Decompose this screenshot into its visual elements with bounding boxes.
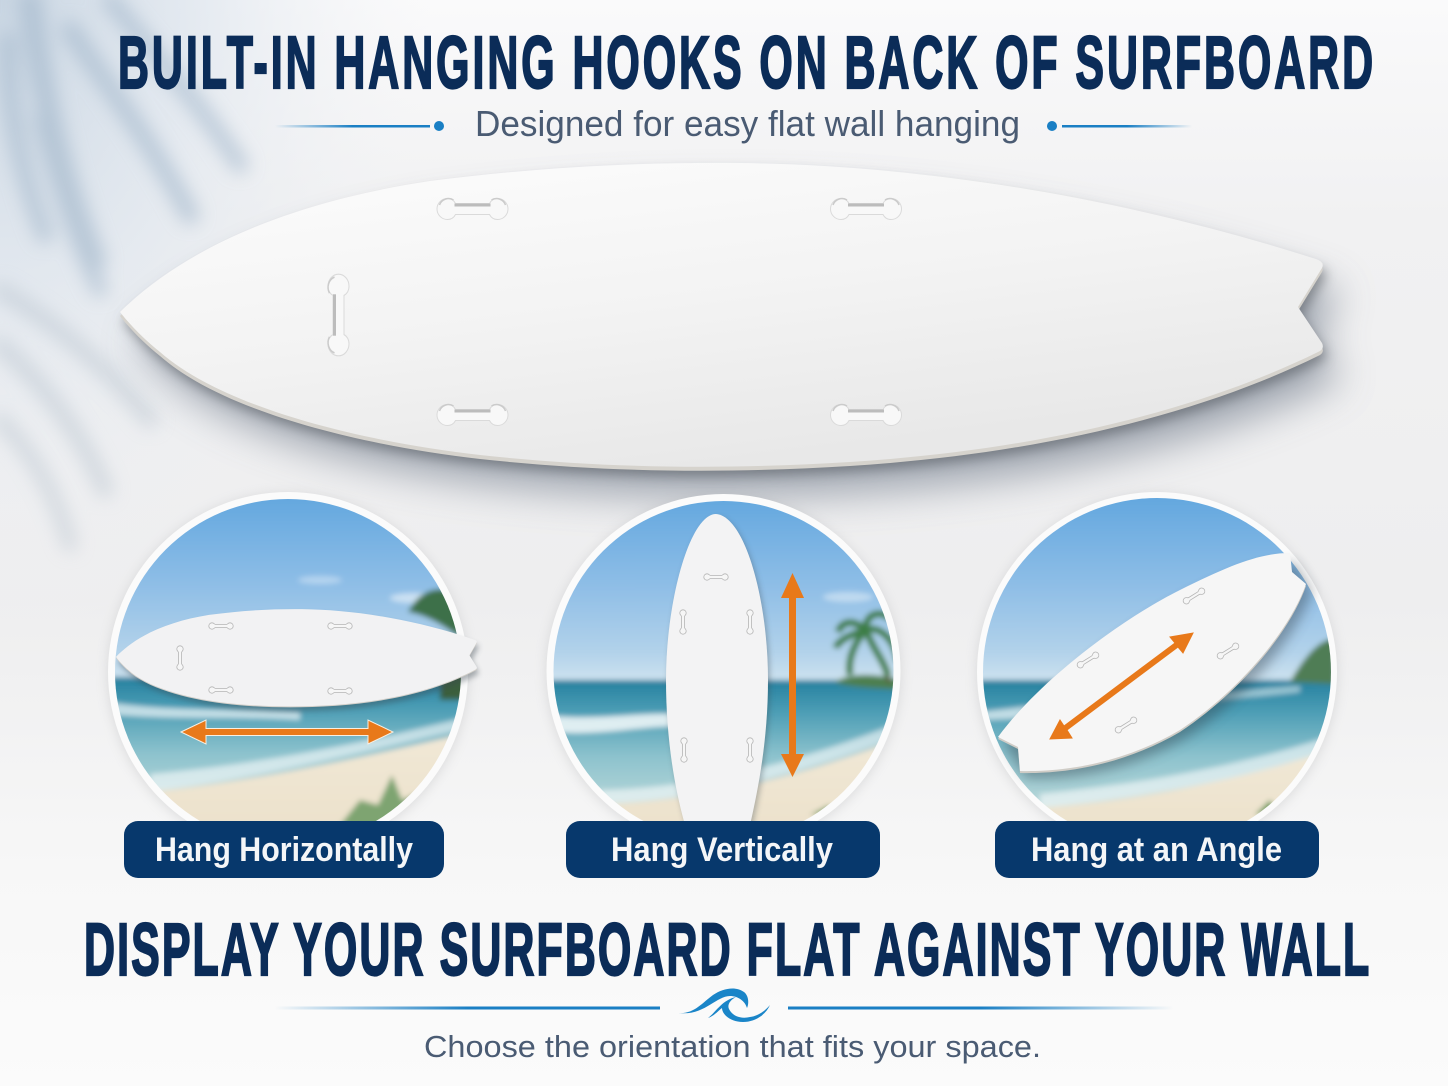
icon: hook nose vertical — [328, 274, 349, 356]
panel: hang vertically — [544, 494, 903, 821]
label: hang at an angle — [995, 821, 1319, 878]
surfboard vertical — [666, 514, 770, 828]
arrow: vertical — [781, 573, 804, 777]
beach scene 3 — [983, 498, 1331, 821]
panel: hang horizontally — [106, 492, 481, 821]
icon: hook bottom left — [437, 404, 508, 426]
palm shadow — [0, 0, 240, 545]
icon: hook top right — [830, 198, 902, 220]
mini hooks — [680, 574, 753, 762]
title: BUILT-IN HANGING HOOKS ON BACK OF SURFBOARD — [118, 21, 1373, 104]
mini hooks — [177, 623, 352, 694]
surfboard horizontal — [116, 609, 479, 711]
label: hang horizontally: Hang Horizontally — [155, 831, 413, 869]
label: hang at an angle: Hang at an Angle — [1031, 831, 1282, 869]
icon: wave — [679, 988, 770, 1022]
subtitle with rules: Designed for easy flat wall hanging — [475, 103, 1020, 144]
label: hang horizontally — [124, 821, 444, 878]
beach scene 2 — [554, 501, 894, 821]
mini hooks — [1076, 587, 1240, 734]
label: hang vertically: Hang Vertically — [611, 831, 833, 869]
icon: hook bottom right — [830, 404, 902, 426]
icon: hook top left — [437, 198, 508, 220]
arrow: diagonal — [1050, 633, 1193, 739]
label: hang vertically — [566, 821, 880, 878]
panel: hang at an angle — [974, 492, 1340, 821]
divider with wave icon — [275, 988, 1173, 1022]
beach scene 1 — [115, 499, 461, 821]
heading: display flat: DISPLAY YOUR SURFBOARD FLAT AGAINST YOUR WALL — [84, 908, 1369, 991]
main surfboard with hooks — [120, 163, 1339, 497]
surfboard angled — [998, 553, 1312, 778]
subtitle with rules — [275, 103, 1192, 144]
arrow: horizontal — [181, 720, 393, 744]
closing text: Choose the orientation that fits your space. — [424, 1029, 1041, 1064]
